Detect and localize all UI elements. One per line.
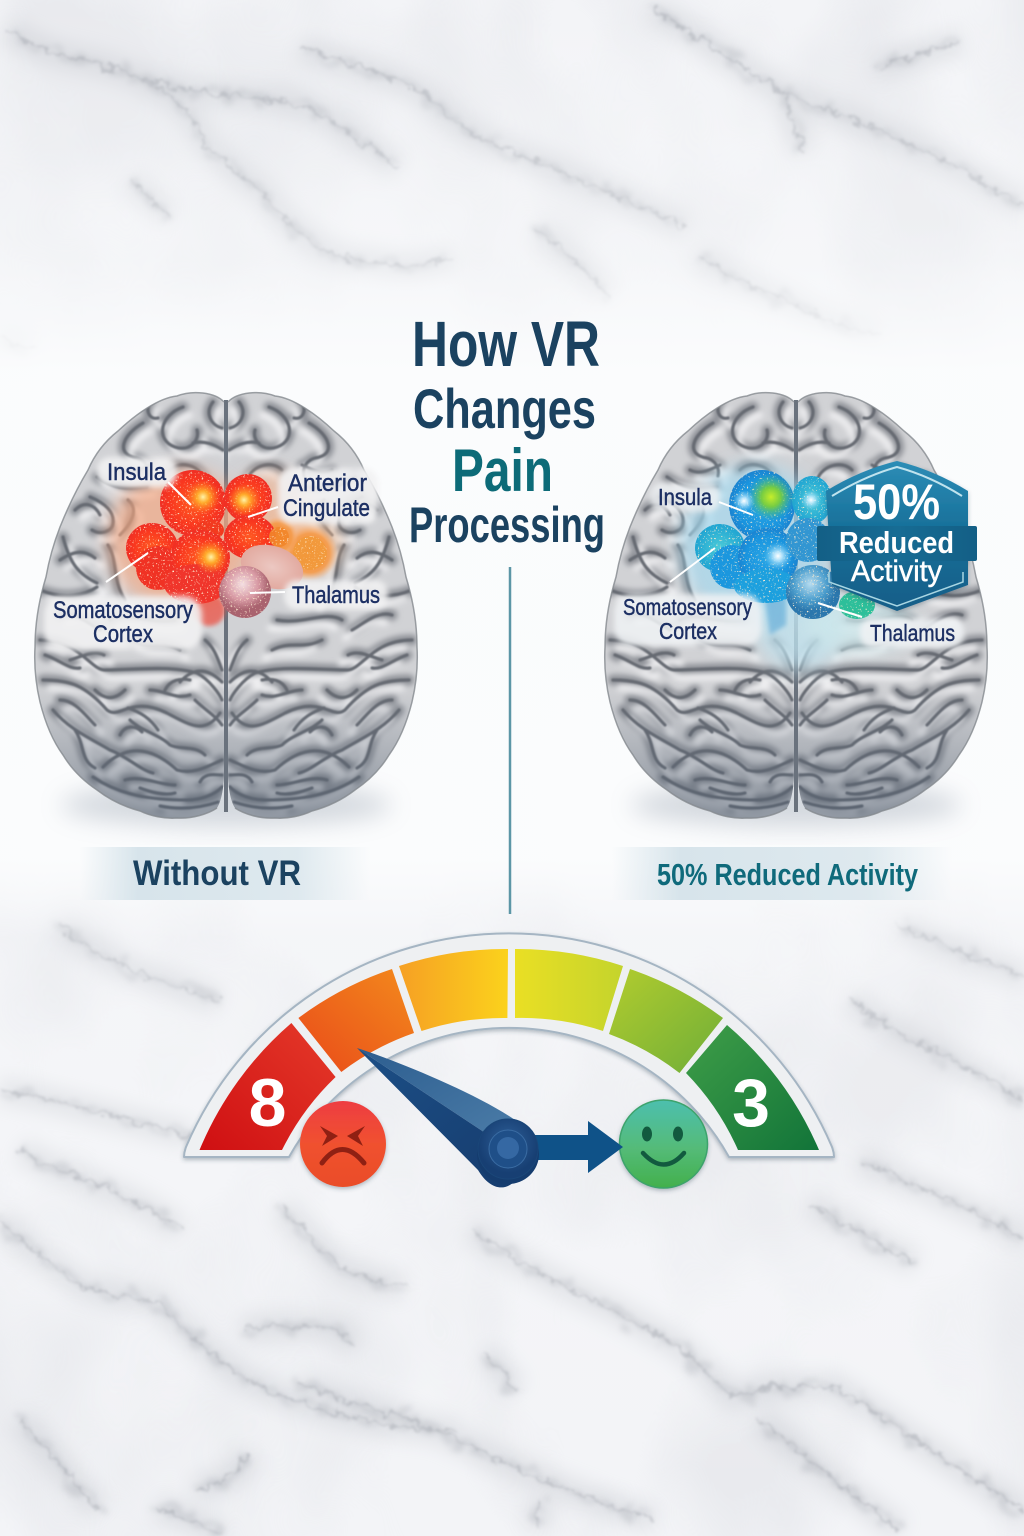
brain: with VR [600, 390, 992, 827]
title: How VR [412, 308, 600, 380]
label: Somatosensory Cortex: Cortex [93, 621, 153, 648]
label: Insula: Insula [658, 484, 712, 510]
gauge frame [184, 933, 834, 1157]
label: Somatosensory Cortex: Somatosensory [623, 594, 752, 620]
hot spots: pain regions [126, 470, 327, 604]
value: 8: 8 [249, 1065, 286, 1141]
title: Changes [413, 377, 596, 440]
caption: Without VR: Without VR [133, 854, 301, 893]
badge: 50% Reduced Activity [817, 461, 977, 611]
label: Somatosensory Cortex [44, 553, 202, 650]
thalamus [219, 537, 309, 618]
icon: angry face [300, 1101, 386, 1187]
value: 3: 3 [732, 1065, 770, 1141]
label: Anterior Cingulate [248, 468, 378, 524]
label: Thalamus: Thalamus [870, 620, 955, 646]
label: Thalamus [818, 603, 964, 648]
thalamus [786, 565, 840, 619]
label: Insula [97, 457, 191, 505]
label: Somatosensory Cortex: Somatosensory [53, 597, 193, 624]
badge: 50% Reduced Activity: Activity [851, 555, 942, 588]
label: Thalamus: Thalamus [292, 582, 380, 609]
label: Thalamus [250, 580, 388, 610]
brain: without VR [30, 390, 422, 827]
divider line [509, 567, 511, 914]
label: Anterior Cingulate: Anterior [288, 470, 367, 497]
label: Anterior Cingulate: Cingulate [283, 495, 370, 522]
icon: happy face [620, 1100, 708, 1188]
bright centres [186, 480, 260, 574]
caption: 50% Reduced Activity [612, 847, 952, 900]
cool spots: reduced regions [695, 470, 875, 619]
pain gauge [184, 933, 834, 1188]
calm glow halo [680, 465, 913, 670]
gauge segments [200, 949, 819, 1150]
label: Somatosensory Cortex [614, 548, 762, 646]
title [409, 308, 605, 553]
title: Processing [409, 497, 605, 553]
activation glow halo [108, 470, 340, 626]
bright centres [733, 473, 821, 570]
badge: 50% Reduced Activity: 50% [853, 474, 940, 530]
label: Insula [650, 483, 753, 515]
caption: 50% Reduced Activity: 50% Reduced Activity [657, 857, 919, 892]
needle [357, 1048, 539, 1187]
arrow [530, 1121, 623, 1173]
badge: 50% Reduced Activity: Reduced [839, 525, 954, 560]
title: Pain [452, 437, 553, 504]
label: Somatosensory Cortex: Cortex [659, 618, 717, 644]
caption: Without VR [80, 847, 370, 900]
label: Insula: Insula [107, 459, 167, 486]
